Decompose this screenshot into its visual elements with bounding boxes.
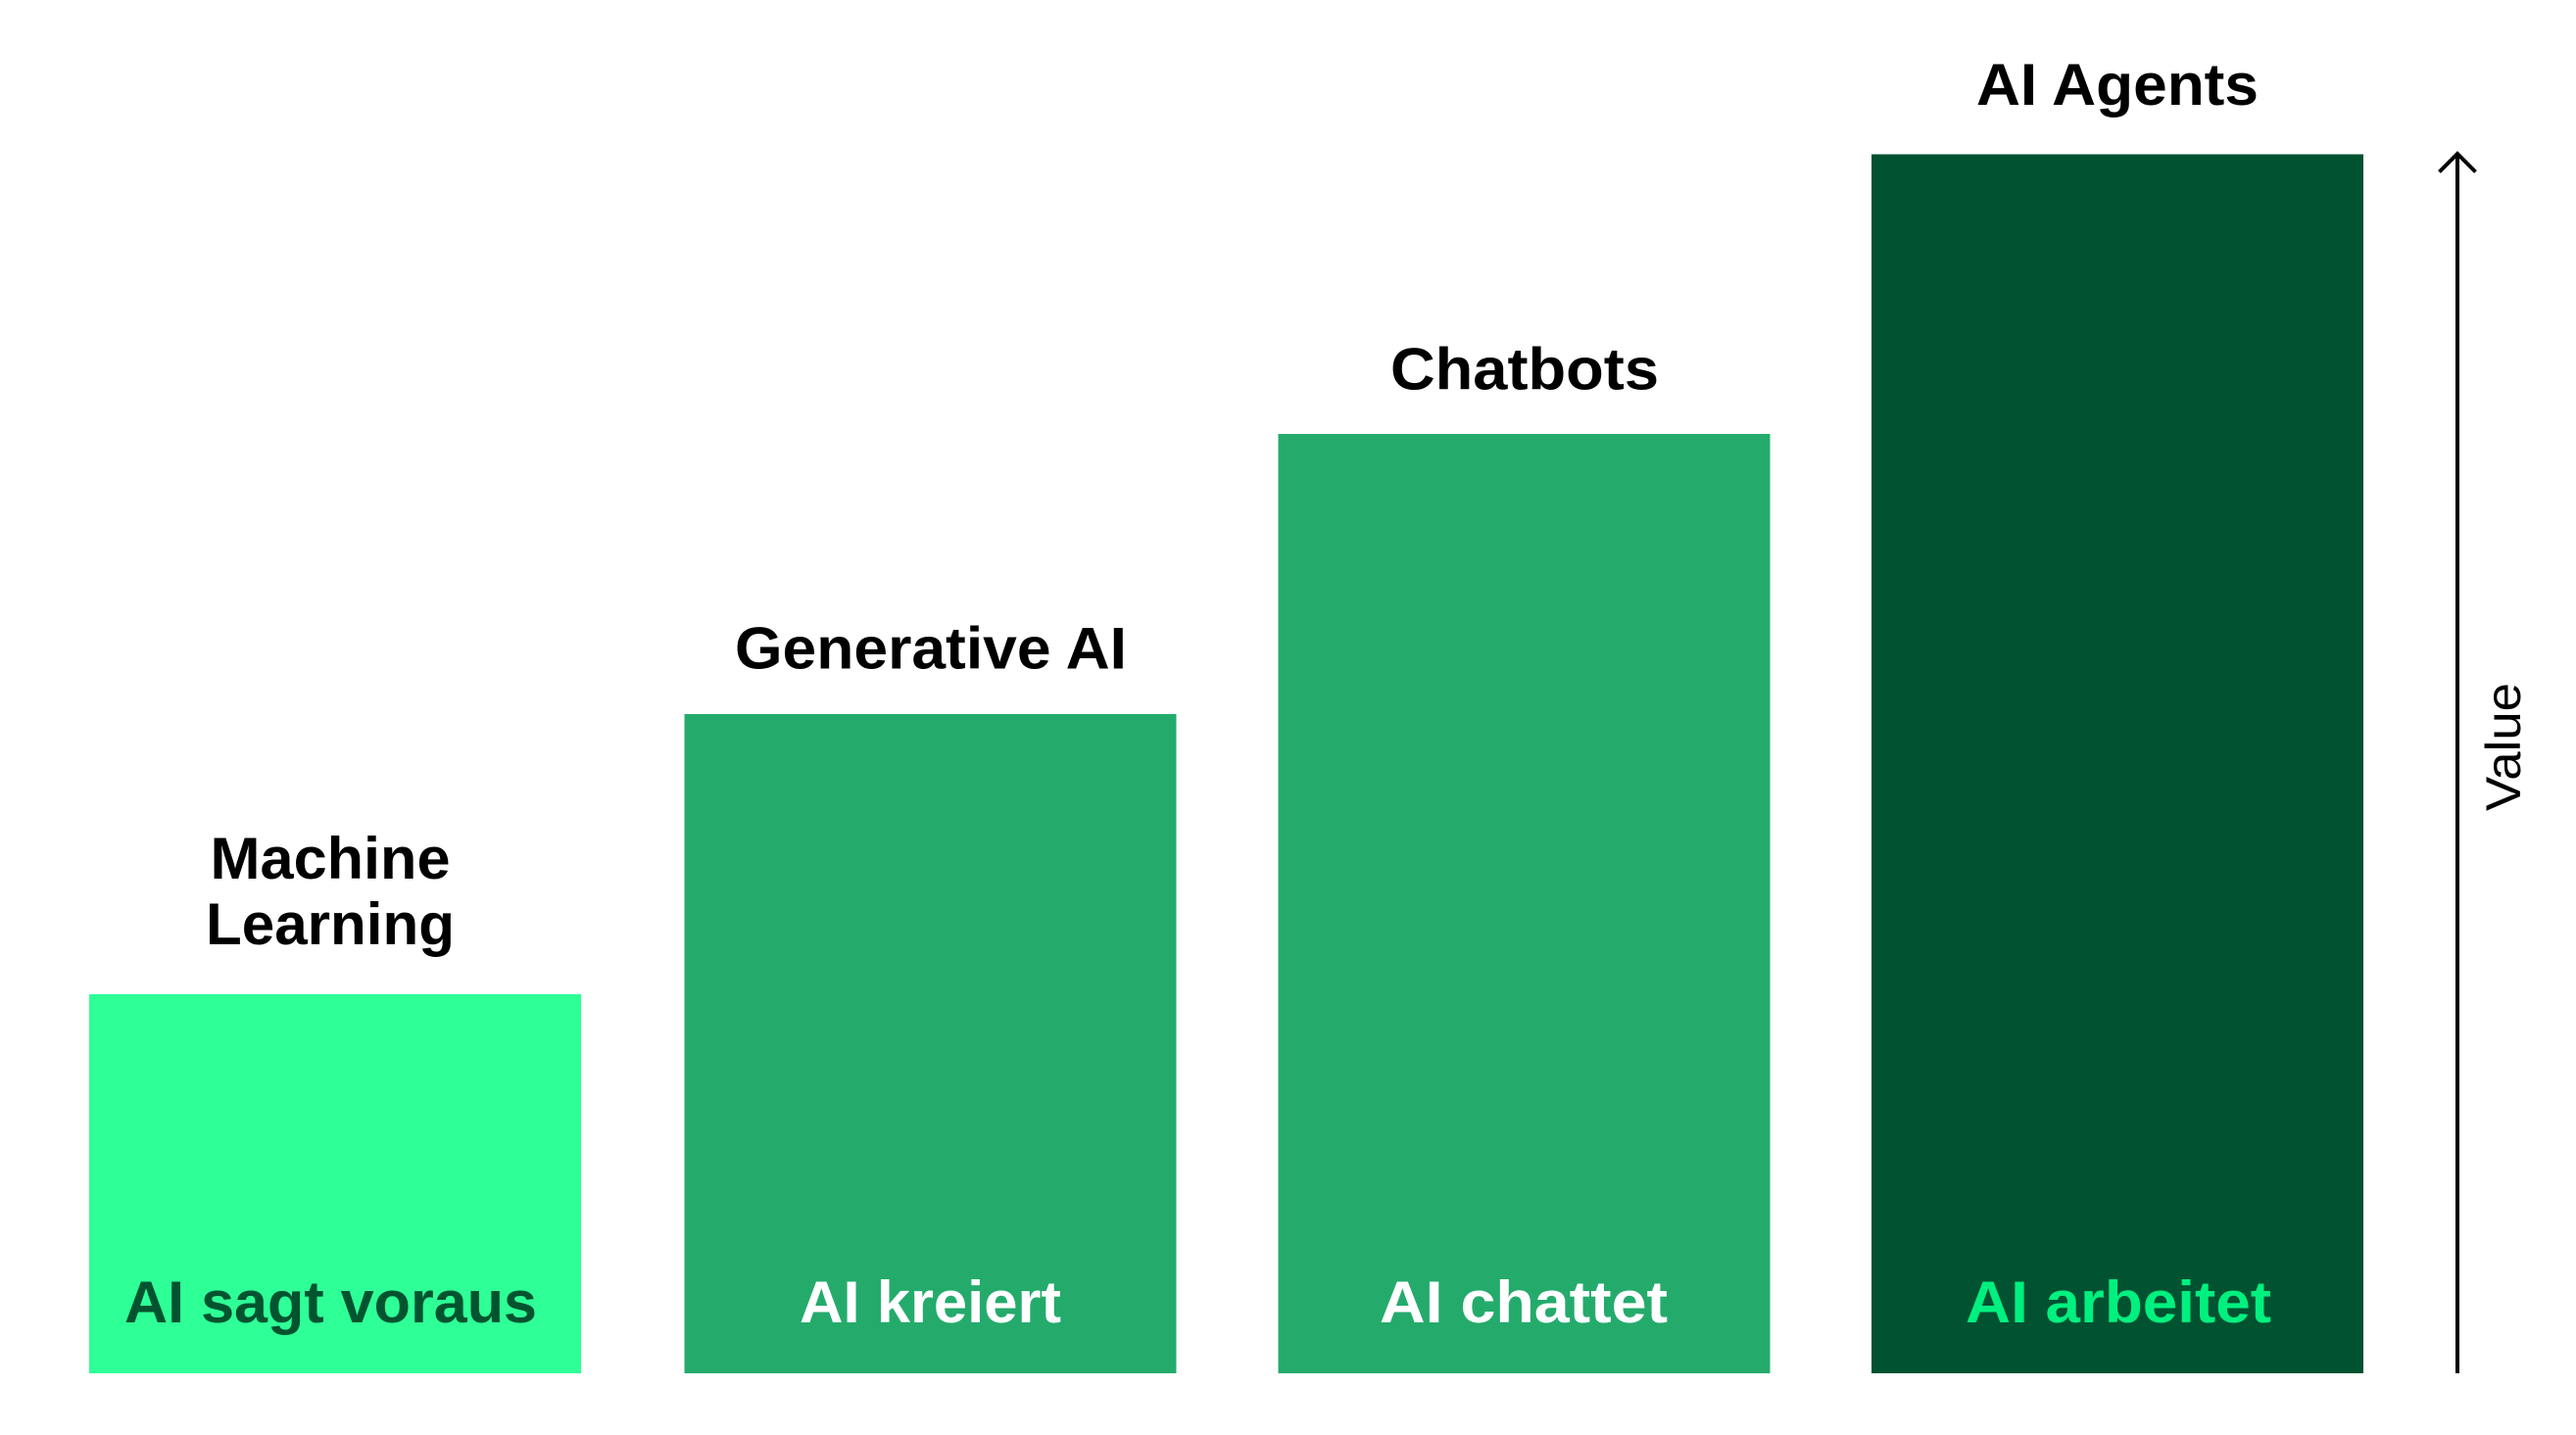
bar label: AI kreiert: AI kreiert (800, 1269, 1061, 1335)
bar: Machine Learning (89, 994, 581, 1373)
heading: Machine Learning: Learning (206, 891, 455, 957)
bar: AI Agents (1871, 155, 2363, 1373)
heading: AI Agents: AI Agents (1976, 52, 2259, 118)
heading: Generative AI: Generative AI (735, 615, 1127, 682)
bar label: AI sagt voraus: AI sagt voraus (124, 1269, 537, 1335)
column: Machine Learning (89, 826, 581, 1373)
arrow: value axis (2440, 154, 2475, 1373)
column: Chatbots (1278, 337, 1770, 1373)
bar label: AI chattet: AI chattet (1380, 1269, 1668, 1335)
heading: Machine Learning: Machine (210, 826, 451, 891)
axis label: Value: Value (2476, 683, 2531, 811)
bar: Chatbots (1278, 434, 1770, 1373)
column: Generative AI (684, 615, 1176, 1373)
bar: Generative AI (684, 714, 1176, 1373)
bar label: AI arbeitet: AI arbeitet (1966, 1269, 2271, 1335)
column: AI Agents (1871, 52, 2363, 1373)
heading: Chatbots: Chatbots (1390, 337, 1659, 402)
